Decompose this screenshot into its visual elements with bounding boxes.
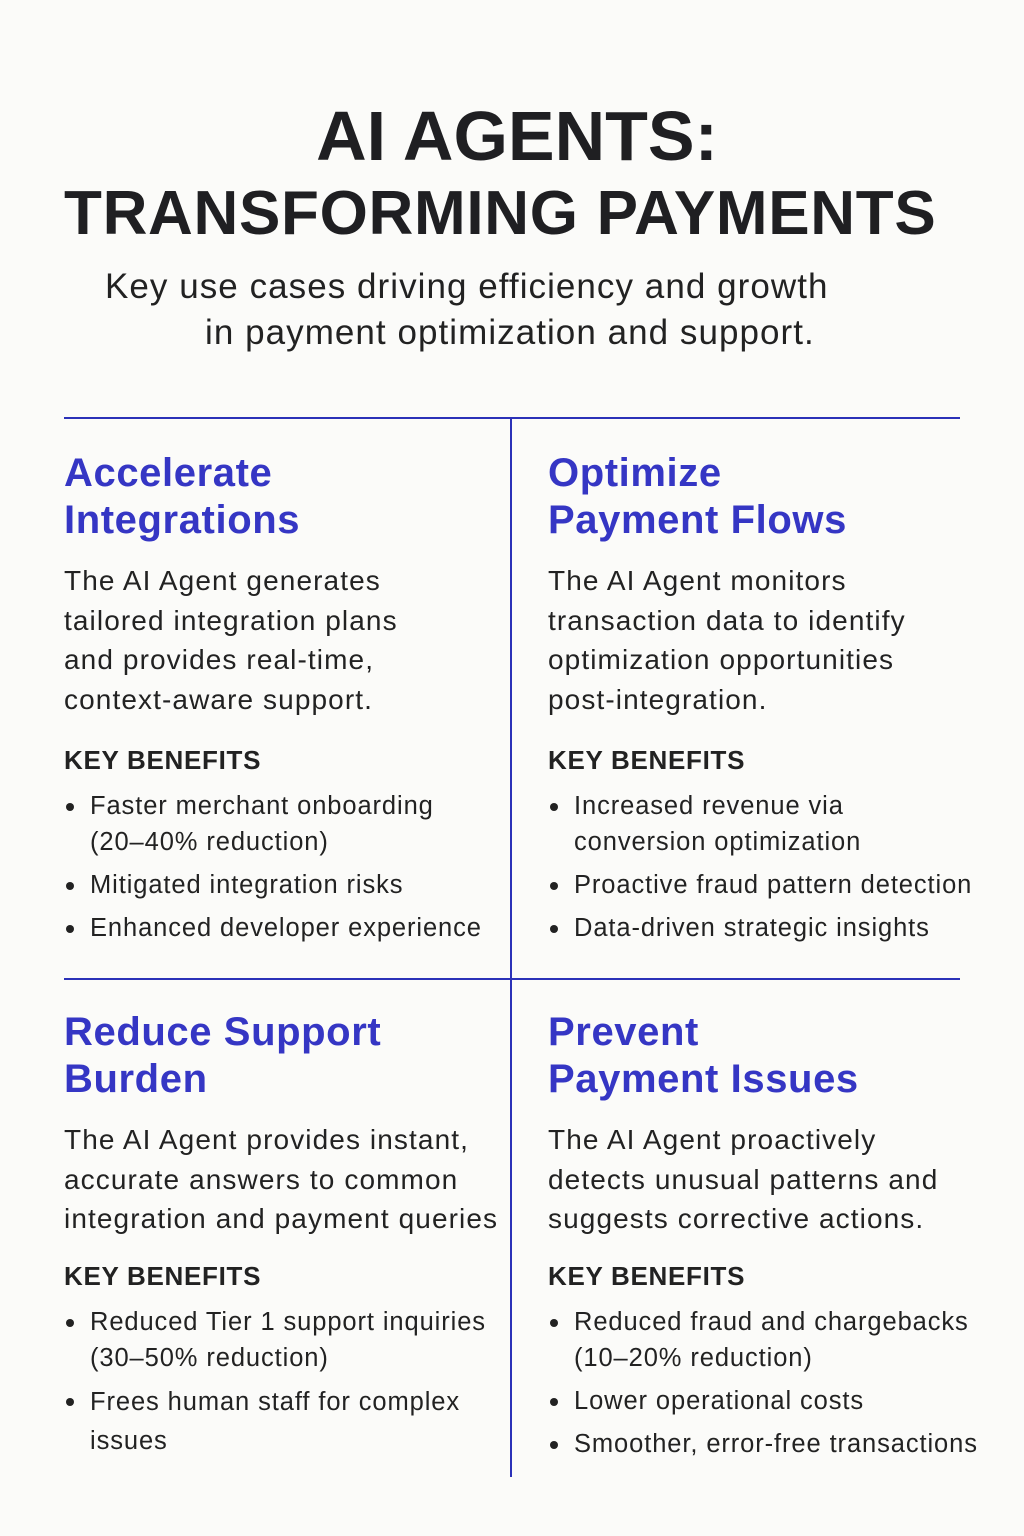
heading: Payment Issues (548, 1057, 859, 1101)
description: transaction data to identify (548, 604, 906, 636)
key benefits label: KEY BENEFITS (548, 745, 745, 775)
benefits list: conversion optimization (574, 828, 861, 856)
description: detects unusual patterns and (548, 1164, 938, 1194)
grid lines (64, 417, 960, 419)
benefits list (66, 792, 482, 942)
heading: Payment Flows (548, 498, 847, 542)
heading: Accelerate (64, 451, 272, 495)
description: and provides real-time, (64, 644, 374, 675)
benefits list: (20–40% reduction) (90, 828, 329, 856)
benefits list: Lower operational costs (574, 1387, 864, 1415)
description: suggests corrective actions. (548, 1203, 924, 1234)
title line 2: TRANSFORMING PAYMENTS (64, 179, 936, 248)
benefits list (550, 792, 972, 942)
key benefits label: KEY BENEFITS (64, 1261, 261, 1291)
benefits list (66, 1308, 486, 1455)
description (548, 1124, 938, 1234)
benefits list: issues (90, 1427, 168, 1455)
benefits list (550, 1308, 978, 1458)
benefits list: Data-driven strategic insights (574, 914, 930, 942)
benefits list: (10–20% reduction) (574, 1344, 813, 1372)
description: optimization opportunities (548, 644, 894, 675)
benefits list: Increased revenue via (574, 792, 844, 820)
panel: accelerate integrations (64, 451, 482, 942)
description: accurate answers to common (64, 1164, 458, 1194)
heading: Reduce Support (64, 1010, 381, 1054)
heading: Burden (64, 1057, 208, 1101)
description: The AI Agent proactively (548, 1124, 876, 1155)
benefits list: (30–50% reduction) (90, 1344, 329, 1372)
description: context-aware support. (64, 684, 373, 714)
benefits list: Reduced fraud and chargebacks (574, 1308, 969, 1336)
description: The AI Agent provides instant, (64, 1124, 469, 1155)
key benefits label: KEY BENEFITS (64, 745, 261, 775)
description: The AI Agent monitors (548, 565, 847, 596)
description: tailored integration plans (64, 604, 398, 636)
benefits list: Faster merchant onboarding (90, 792, 434, 820)
panel: optimize payment flows (548, 451, 972, 942)
benefits list: Smoother, error-free transactions (574, 1430, 978, 1458)
heading (548, 451, 847, 542)
panel: reduce support burden (64, 1010, 498, 1455)
description: integration and payment queries (64, 1203, 498, 1234)
benefits list: Reduced Tier 1 support inquiries (90, 1308, 486, 1336)
panel: prevent payment issues (548, 1010, 978, 1458)
subtitle: Key use cases driving efficiency and growth (105, 267, 828, 306)
benefits list: Enhanced developer experience (90, 914, 482, 942)
heading: Optimize (548, 451, 722, 495)
benefits list: Proactive fraud pattern detection (574, 871, 972, 899)
heading (64, 1010, 381, 1101)
benefits list: Mitigated integration risks (90, 871, 403, 899)
description (64, 565, 398, 715)
heading: Integrations (64, 498, 300, 542)
description: post-integration. (548, 684, 768, 714)
heading (64, 451, 300, 542)
heading: Prevent (548, 1010, 699, 1054)
title: AI AGENTS: (316, 97, 718, 175)
subtitle (105, 267, 828, 352)
benefits list: Frees human staff for complex (90, 1388, 460, 1416)
description: The AI Agent generates (64, 565, 381, 596)
key benefits label: KEY BENEFITS (548, 1261, 745, 1291)
description (548, 565, 906, 715)
subtitle: in payment optimization and support. (205, 313, 815, 352)
heading (548, 1010, 859, 1101)
description (64, 1124, 498, 1234)
